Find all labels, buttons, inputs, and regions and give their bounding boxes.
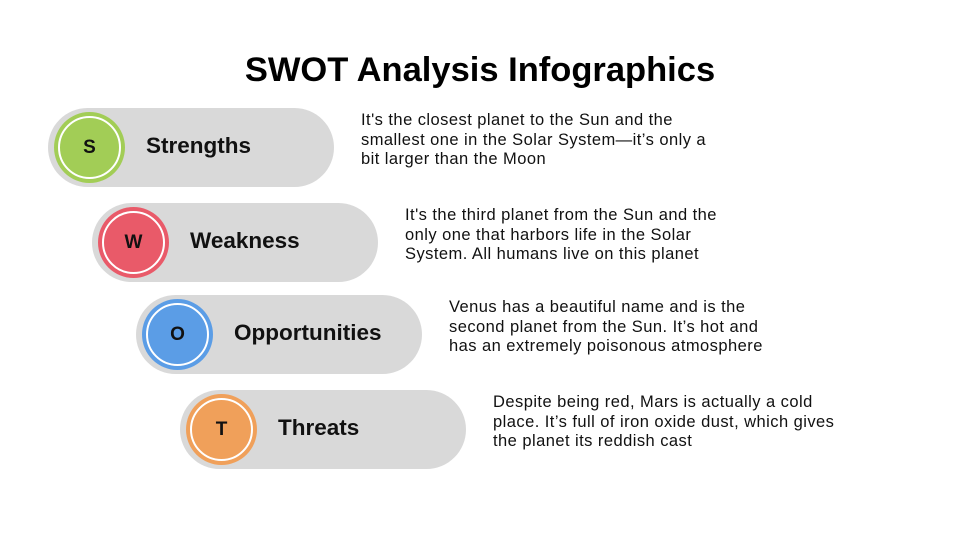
label: threats: Threats: [278, 415, 359, 440]
text: opportunities description: second planet from the Sun. It’s hot and: [449, 318, 758, 336]
icon: W circle: W: [125, 232, 142, 253]
icon: W circle: [98, 207, 169, 278]
text: strengths description: [361, 111, 706, 168]
icon: S circle: S: [83, 137, 96, 158]
text: opportunities description: Venus has a beautiful name and is the: [449, 298, 745, 316]
pill: opportunities: [136, 295, 422, 374]
text: opportunities description: [449, 298, 763, 355]
text: threats description: [493, 393, 834, 450]
text: opportunities description: has an extremely poisonous atmosphere: [449, 337, 763, 355]
panel: opportunities: [136, 295, 763, 374]
text: weakness description: [405, 206, 717, 263]
text: strengths description: bit larger than the Moon: [361, 150, 546, 168]
text: weakness description: It's the third planet from the Sun and the: [405, 206, 717, 224]
title: SWOT Analysis Infographics: [245, 51, 715, 89]
label: opportunities: Opportunities: [234, 320, 382, 345]
pill: threats: [180, 390, 466, 469]
pill: strengths: [48, 108, 334, 187]
icon: O circle: [142, 299, 213, 370]
pill: weakness: [92, 203, 378, 282]
text: threats description: place. It’s full of iron oxide dust, which gives: [493, 412, 834, 430]
icon: T circle: T: [216, 419, 227, 440]
panel: threats: [180, 390, 834, 469]
label: strengths: Strengths: [146, 133, 251, 158]
icon: O circle: O: [170, 324, 185, 345]
label: weakness: Weakness: [190, 228, 300, 253]
icon: T circle: [186, 394, 257, 465]
text: threats description: Despite being red, Mars is actually a cold: [493, 393, 813, 411]
text: threats description: the planet its reddish cast: [493, 432, 692, 450]
text: weakness description: only one that harbors life in the Solar: [405, 226, 691, 244]
text: strengths description: smallest one in the Solar System—it’s only a: [361, 130, 706, 148]
panel: weakness: [92, 203, 717, 282]
text: strengths description: It's the closest planet to the Sun and the: [361, 111, 673, 129]
text: weakness description: System. All humans live on this planet: [405, 245, 699, 263]
panel: strengths: [48, 108, 706, 187]
icon: S circle: [54, 112, 125, 183]
